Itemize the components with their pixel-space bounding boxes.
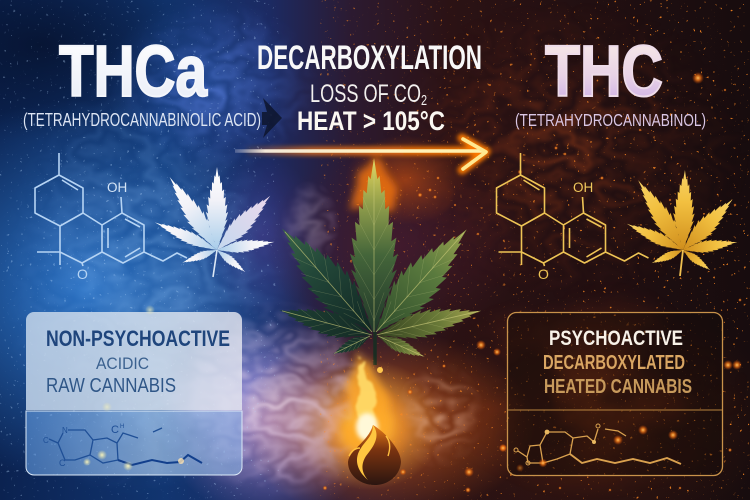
label: decarboxylated: DECARBOXYLATED	[543, 352, 685, 374]
panel background lower	[26, 411, 242, 475]
molecule sketch: blue: H	[120, 424, 124, 430]
label: raw cannabis: RAW CANNABIS	[46, 375, 176, 397]
molecule sketch: blue: C	[43, 436, 49, 445]
label: heated cannabis: HEATED CANNABIS	[544, 376, 692, 398]
heading: decarboxylation: DECARBOXYLATION	[257, 39, 482, 77]
subtitle: tetrahydrocannabinolic acid: (TETRAHYDROCANNABINOLIC ACID)	[23, 110, 261, 130]
embers and particles	[322, 72, 742, 493]
molecule: THCa structure: OH	[107, 180, 127, 195]
central green cannabis leaf	[266, 158, 484, 365]
molecule sketch: blue: C	[59, 458, 66, 468]
molecule: THCa structure: O	[77, 266, 88, 282]
panel: THCa properties	[26, 305, 242, 475]
molecule: THC structure	[496, 153, 648, 282]
molecule sketch: blue: C	[111, 424, 119, 436]
label: psychoactive: PSYCHOACTIVE	[549, 327, 683, 350]
title: THCa: THCa	[59, 32, 208, 112]
label: non-psychoactive: NON-PSYCHOACTIVE	[46, 326, 230, 351]
icon: white cannabis leaf	[152, 167, 277, 277]
panel background upper	[26, 312, 242, 410]
molecule sketch: blue: N	[62, 426, 68, 435]
text: loss of CO2: LOSS OF CO	[310, 80, 463, 108]
glowing process arrow	[235, 138, 486, 170]
icon: golden cannabis leaf	[624, 170, 740, 276]
molecule: THC structure: O	[538, 266, 549, 282]
panel: THC properties	[499, 312, 722, 476]
molecule sketch: amber	[499, 424, 681, 468]
text: loss of CO2: 2	[421, 92, 427, 109]
molecule: THCa structure	[35, 153, 187, 282]
molecule sketch: blue	[43, 305, 202, 471]
molecule: THC structure: OH	[573, 180, 593, 195]
fire glow behind leaf tip	[352, 152, 396, 212]
text: heat threshold: HEAT > 105°C	[297, 106, 445, 136]
flame	[321, 350, 413, 485]
panel outline	[508, 312, 722, 476]
dark chevron arrow	[262, 98, 282, 138]
label: acidic: ACIDIC	[96, 354, 149, 373]
title: THC: THC	[545, 32, 663, 112]
